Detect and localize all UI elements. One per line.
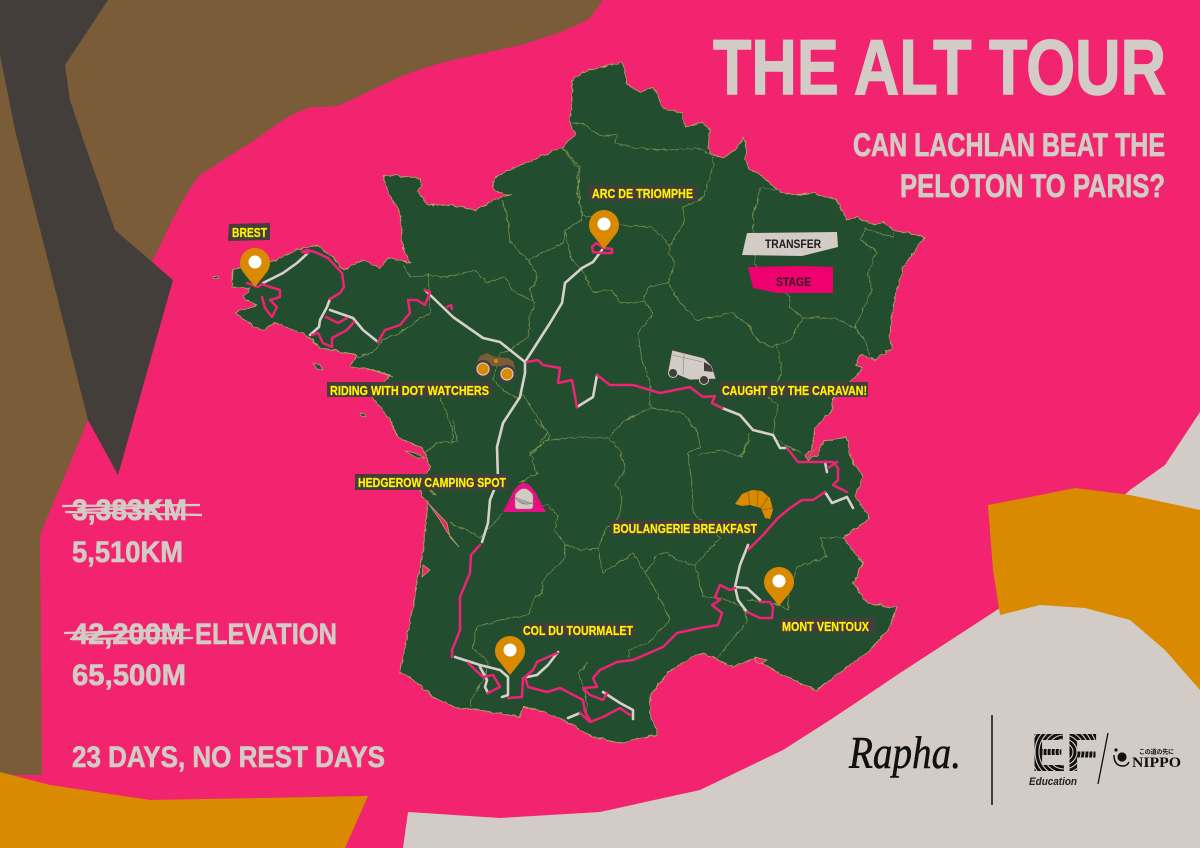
background: orange bottom left [0, 772, 368, 848]
label: Mont Ventoux: MONT VENTOUX [782, 619, 869, 634]
label: Boulangerie breakfast: BOULANGERIE BREAKFAST [613, 521, 757, 536]
legend: stage [748, 266, 833, 293]
logo: Nippo [1114, 748, 1181, 771]
background: orange right [988, 488, 1200, 690]
logo: EF Education: Education [1029, 776, 1077, 788]
pin: Col du Tourmalet [495, 636, 525, 675]
map of France [213, 62, 925, 743]
label: Arc de Triomphe: ARC DE TRIOMPHE [592, 186, 693, 201]
label: Col du Tourmalet: COL DU TOURMALET [523, 623, 633, 638]
label: Riding with dot watchers: RIDING WITH DOT WATCHERS [330, 383, 489, 398]
label: Caught by the caravan: CAUGHT BY THE CARAVAN! [722, 383, 867, 398]
legend: transfer [742, 232, 838, 256]
pin: Brest [240, 248, 270, 287]
route: transfer sections [263, 250, 853, 719]
background: brown shape [0, 0, 603, 775]
label: Brest: BREST [232, 225, 267, 240]
stats: ELEVATION [195, 618, 337, 651]
islands and estuaries [213, 276, 436, 495]
divider [991, 715, 993, 805]
background: dark grey shape [0, 0, 173, 475]
label: Brest [228, 223, 270, 241]
route: stage sections [247, 243, 847, 722]
icon: binoculars [474, 353, 516, 383]
pin: Mont Ventoux [764, 567, 794, 606]
pin: Arc de Triomphe [589, 210, 619, 249]
stats: 65,500M [72, 659, 186, 692]
mainland outline [232, 62, 925, 743]
stats [62, 494, 385, 774]
stats: 23 DAYS, NO REST DAYS [72, 741, 385, 774]
slash between logos [1098, 733, 1108, 784]
stats: 42,200M [72, 618, 185, 651]
subtitle [853, 127, 1165, 204]
stats: 5,510KM [72, 536, 183, 569]
label: Hedgerow camping spot: HEDGEROW CAMPING SPOT [358, 475, 506, 490]
logo: EF Education: EF [1031, 723, 1098, 783]
logo: Nippo: NIPPO [1132, 755, 1181, 771]
background: beige bottom right [403, 412, 1200, 848]
icon: tent [503, 483, 546, 512]
legend: transfer: TRANSFER [765, 237, 821, 251]
region boundaries [357, 123, 893, 717]
logo: Rapha: Rapha. [848, 727, 961, 778]
logo: Nippo: この道の先に [1139, 748, 1174, 756]
icon: croissant [735, 490, 773, 519]
legend: stage: STAGE [776, 275, 811, 289]
stats: 3,383KM [72, 494, 187, 527]
icon: caravan van [668, 350, 716, 384]
